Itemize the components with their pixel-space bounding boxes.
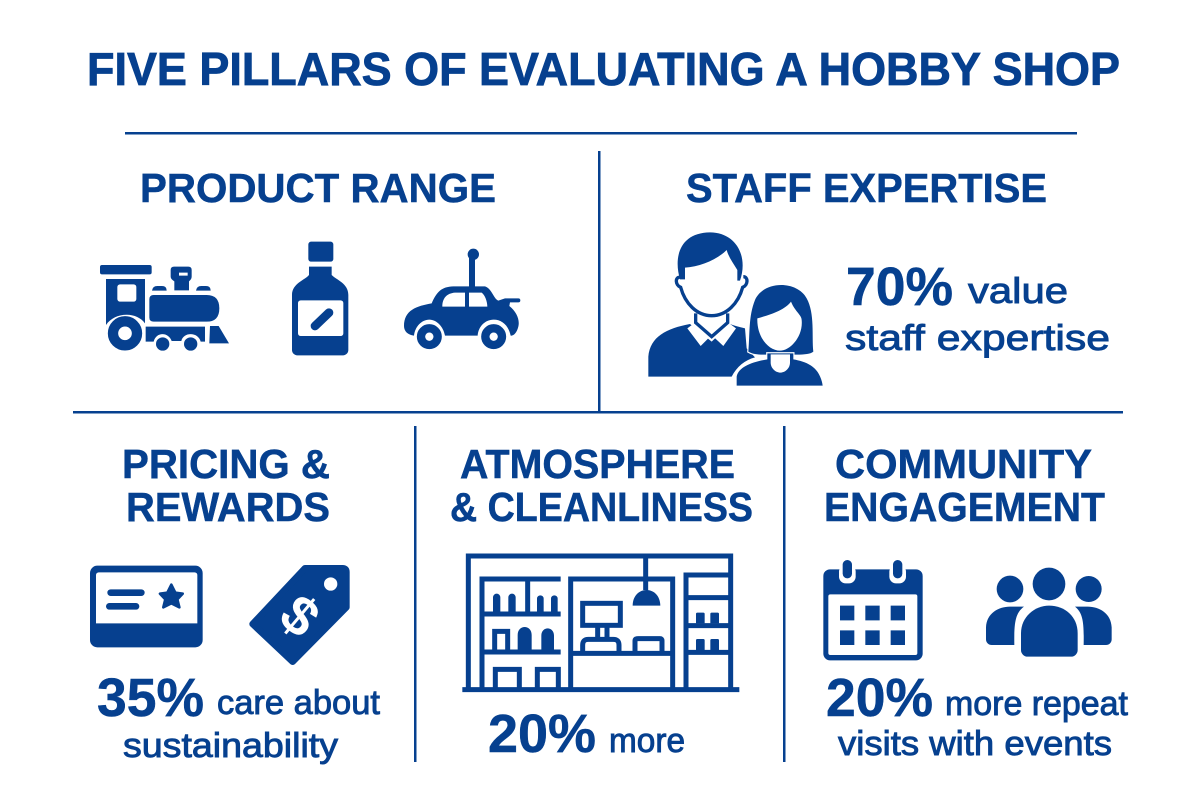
icon: calendar <box>823 560 923 660</box>
panel: product range <box>100 165 520 355</box>
heading: atmosphere and cleanliness: ATMOSPHERE <box>460 441 735 487</box>
stat: 20% more repeat visits with events: 20% <box>826 668 933 728</box>
icon: shop interior <box>462 556 739 690</box>
panel: staff expertise <box>648 165 1110 386</box>
panel: pricing and rewards <box>90 441 381 765</box>
stat: 35% care about sustainability: care about <box>217 684 381 722</box>
icon: paint bottle <box>292 242 348 355</box>
heading: pricing and rewards <box>122 441 330 530</box>
icon: remote control car <box>404 249 520 345</box>
heading: pricing and rewards: REWARDS <box>126 484 330 530</box>
title: FIVE PILLARS OF EVALUATING A HOBBY SHOP <box>87 43 1120 95</box>
heading: atmosphere and cleanliness: & CLEANLINESS <box>450 484 753 530</box>
stat: 20% more repeat visits with events: visits with events <box>838 725 1112 763</box>
heading: community engagement: COMMUNITY <box>835 441 1092 487</box>
stat: 20% more: 20% <box>488 704 596 764</box>
stat: 35% care about sustainability: 35% <box>97 668 204 728</box>
heading: community engagement: ENGAGEMENT <box>824 484 1105 530</box>
icon: loyalty card <box>90 566 203 647</box>
icon: price tag: $ <box>268 582 332 649</box>
panel: atmosphere and cleanliness <box>450 441 753 764</box>
icon: toy train <box>100 265 229 351</box>
panel: community engagement <box>823 441 1129 763</box>
stat: 35% care about sustainability <box>97 668 381 765</box>
heading: staff expertise: STAFF EXPERTISE <box>686 165 1047 211</box>
stat: 20% more: more <box>609 722 685 760</box>
stat: 70% value staff expertise <box>845 257 1110 358</box>
stat: 20% more <box>488 704 685 764</box>
stat: 70% value staff expertise: 70% <box>846 257 953 317</box>
heading: product range: PRODUCT RANGE <box>140 165 496 211</box>
icon: two staff members <box>648 232 823 386</box>
heading: pricing and rewards: PRICING & <box>122 441 330 487</box>
stat: 20% more repeat visits with events <box>826 668 1129 763</box>
stat: 20% more repeat visits with events: more repeat <box>945 685 1129 723</box>
icon: price tag <box>253 568 346 662</box>
heading: community engagement <box>824 441 1105 530</box>
heading: atmosphere and cleanliness <box>450 441 753 530</box>
stat: 35% care about sustainability: sustainability <box>123 727 338 765</box>
stat: 70% value staff expertise: staff expertise <box>845 317 1110 358</box>
icon: group of people <box>986 568 1112 657</box>
stat: 70% value staff expertise: value <box>968 270 1068 311</box>
